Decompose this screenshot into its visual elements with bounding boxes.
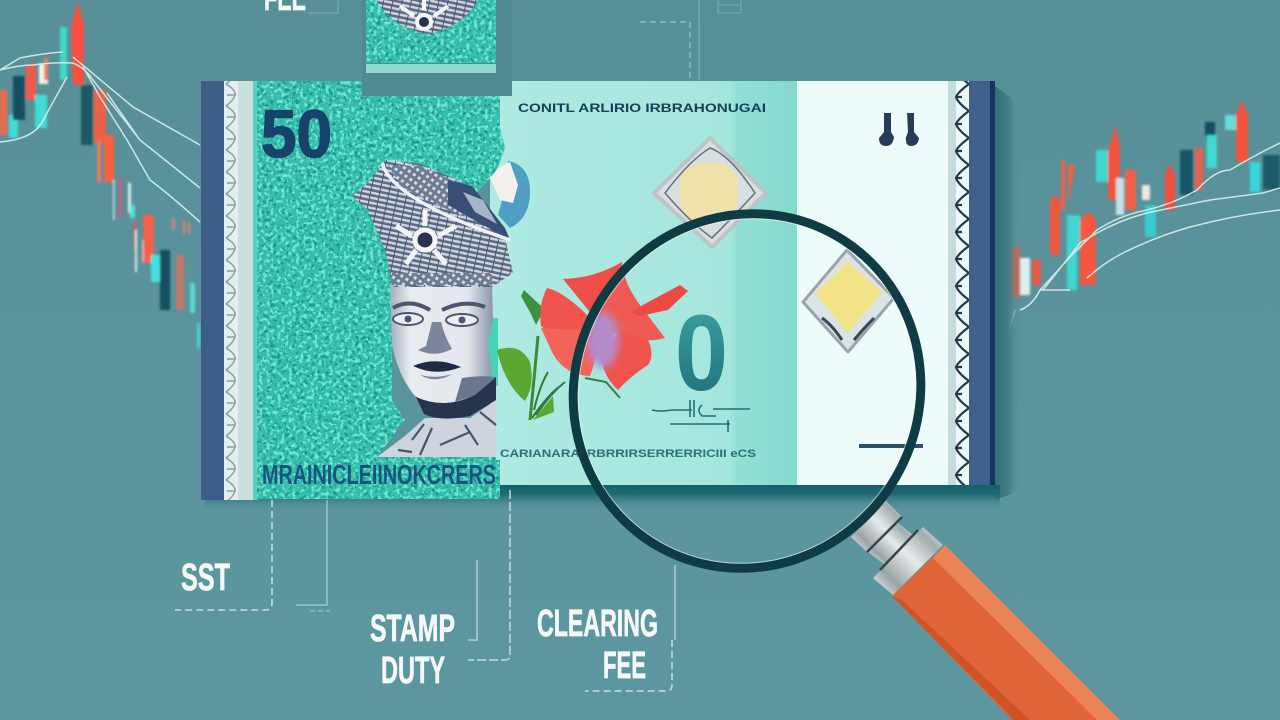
label: clearing fee <box>537 603 658 687</box>
portrait <box>352 160 513 457</box>
connector: stamp duty <box>468 490 510 660</box>
fragment texture <box>366 0 496 63</box>
label: stamp duty: DUTY <box>381 650 445 692</box>
centre microprint line: CARIANARA IRBRRIRSERRERRICIII eCS <box>500 448 756 460</box>
blue and white watermark blob <box>490 161 530 228</box>
left candlestick chart <box>0 2 200 348</box>
right blue band <box>969 81 995 485</box>
connector: secondary SST <box>296 500 330 611</box>
label: stamp duty <box>370 608 455 692</box>
top cut-out fragment <box>362 0 512 96</box>
label: clearing fee: CLEARING <box>537 603 658 645</box>
large zero numeral: 0 <box>675 292 728 413</box>
banknote shadow <box>205 86 1022 511</box>
hibiscus flower <box>497 262 688 420</box>
collar <box>377 400 496 457</box>
lens ring <box>509 150 985 632</box>
lower ornamental diamond <box>803 250 894 352</box>
orange handle <box>892 545 1120 720</box>
hat medallion <box>396 210 456 264</box>
cheek shading <box>455 376 496 402</box>
label: SST: SST <box>181 557 230 599</box>
label: clearing fee: FEE <box>603 645 646 687</box>
left blue band <box>201 81 224 500</box>
right candlestick chart <box>1003 100 1280 350</box>
magnifying glass <box>509 150 1120 720</box>
left ornamental strip <box>224 81 258 500</box>
white right panel <box>797 81 948 485</box>
connector: clearing fee <box>585 565 675 691</box>
small script under zero <box>652 400 750 432</box>
banknote microprint title: CONITL ARLIRIO IRBRAHONUGAI <box>518 101 766 115</box>
neck shadow <box>416 377 496 419</box>
facial features <box>393 303 485 379</box>
handle collar <box>851 500 943 595</box>
face <box>390 284 493 404</box>
fragment pale stripe <box>366 64 496 73</box>
textured teal panel <box>257 81 505 499</box>
lower name microprint: MRAINICLEIINOKCRERS <box>262 459 496 490</box>
denomination 50: 50 <box>261 97 332 172</box>
mint centre panel <box>490 81 798 485</box>
connector: SST <box>175 500 272 610</box>
right ornamental strip <box>948 81 969 485</box>
teal patch beside face <box>468 318 498 386</box>
top right connector lines <box>640 0 741 80</box>
label: stamp duty: STAMP <box>370 608 455 650</box>
signature dash <box>859 444 923 448</box>
serial marks top right <box>879 113 919 146</box>
banknote <box>201 81 995 500</box>
upper ornamental diamond <box>654 138 766 247</box>
songkok hat <box>352 160 513 287</box>
fragment hat medallion <box>376 0 478 34</box>
